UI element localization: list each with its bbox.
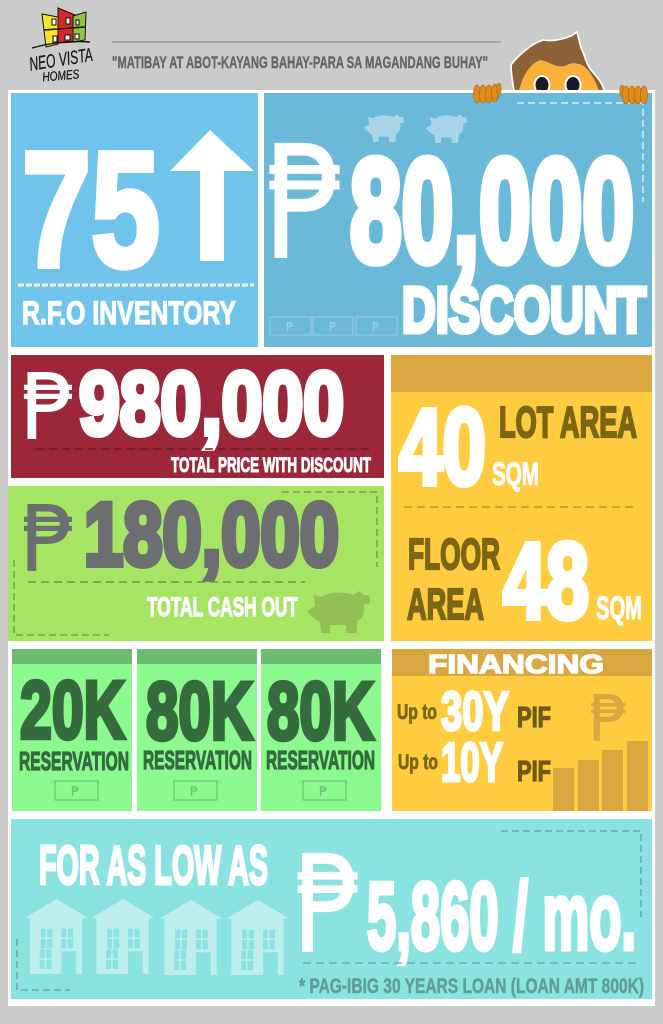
panel: financing: Up to	[398, 751, 438, 774]
panel: R.F.O inventory	[11, 93, 258, 347]
mascot head	[511, 32, 605, 96]
logo: Neo Vista Homes: HOMES	[42, 66, 80, 85]
panel: monthly amortization: FOR AS LOW AS	[39, 834, 268, 896]
panel: financing: Up to	[397, 701, 437, 724]
mascot hands	[473, 83, 648, 104]
panel: total cash out	[8, 484, 384, 641]
panel: lot and floor area: 48	[503, 520, 589, 641]
small peso boxes	[270, 317, 397, 335]
panel: R.F.O inventory: 75	[22, 118, 160, 301]
panel: total price: ₱	[21, 354, 77, 461]
icon: up arrow	[170, 130, 254, 261]
panel: financing: FINANCING	[428, 649, 604, 679]
panel: financing: PIF	[517, 702, 551, 734]
panel: reservation 80K	[137, 649, 257, 811]
panel: R.F.O inventory: R.F.O INVENTORY	[22, 295, 236, 331]
panel: financing: ₱	[589, 683, 629, 757]
icon: pigs	[364, 114, 467, 143]
panel: monthly amortization: ₱	[294, 827, 364, 985]
panel: financing: 30Y	[441, 680, 509, 742]
panel: total cash out: TOTAL CASH OUT	[147, 592, 298, 622]
logo: Neo Vista Homes: NEO VISTA	[28, 45, 94, 76]
panel: discount: ₱	[265, 112, 347, 296]
panel: discount: ₱	[286, 320, 294, 334]
panel: total price: 980,000	[79, 353, 344, 453]
panel: reservation 80K second: 80K	[267, 666, 374, 757]
panel: financing	[392, 649, 652, 811]
panel: reservation 20K	[12, 649, 132, 811]
panel: reservation 80K second: RESERVATION	[266, 745, 375, 775]
panel: reservation 80K: RESERVATION	[143, 745, 252, 775]
panel: lot and floor area	[391, 355, 652, 641]
icon: houses	[25, 899, 290, 975]
panel: reservation 80K: ₱	[190, 785, 198, 800]
panel: discount: ₱	[329, 320, 337, 334]
panel: total cash out: ₱	[21, 486, 77, 593]
panel: financing: PIF	[517, 756, 551, 788]
panel: lot and floor area: 40	[399, 386, 486, 507]
panel: reservation 20K: 20K	[20, 665, 125, 756]
panel: reservation 20K: ₱	[71, 785, 79, 800]
header rule	[112, 41, 501, 43]
panel: reservation 80K second	[261, 649, 381, 811]
panel: discount	[264, 93, 652, 347]
panel: total cash out: 180,000	[84, 484, 339, 584]
panel: lot and floor area: SQM	[492, 456, 539, 492]
panel: total price: TOTAL PRICE WITH DISCOUNT	[171, 454, 371, 477]
panel: lot and floor area: AREA	[407, 580, 484, 629]
panel: total price	[11, 353, 384, 478]
logo: Neo Vista Homes	[28, 8, 94, 85]
panel: reservation 80K second: ₱	[319, 785, 327, 800]
chart: bars	[553, 741, 648, 811]
panel: discount: ₱	[372, 320, 380, 334]
icon: piggy bank	[307, 591, 370, 633]
panel: financing: 10Y	[441, 731, 503, 793]
panel: monthly amortization	[11, 819, 652, 999]
panel: lot and floor area: FLOOR	[408, 530, 500, 579]
panel: reservation 20K: RESERVATION	[19, 746, 129, 776]
panel: reservation 80K: 80K	[146, 666, 253, 757]
